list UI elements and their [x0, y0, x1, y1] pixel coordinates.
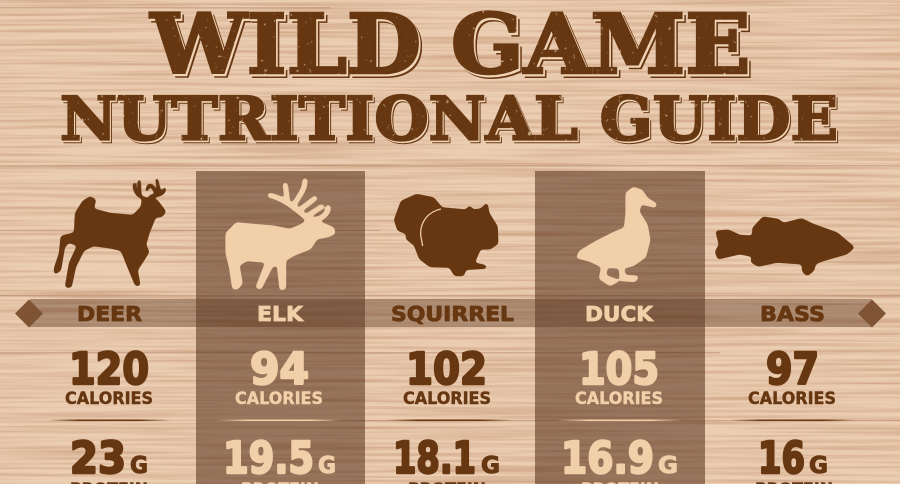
- column: bass: 16: [758, 433, 805, 484]
- icon: squirrel: [395, 195, 497, 275]
- panel: duck column: [535, 171, 705, 484]
- column: squirrel: 18.1: [393, 433, 476, 484]
- column: squirrel: [387, 302, 514, 484]
- column: bass: BASS: [760, 302, 825, 326]
- column: bass: G: [809, 453, 828, 479]
- column: elk: 94: [250, 344, 309, 395]
- column: bass: [730, 302, 855, 484]
- title: nutritional guide: NUTRITIONAL GUIDE: [61, 86, 839, 156]
- column: deer: CALORIES: [65, 389, 153, 408]
- column: bass: 97: [766, 344, 819, 395]
- panel: elk column: [196, 171, 365, 484]
- column: duck: 105: [579, 344, 659, 395]
- title: wild game: WILD GAME: [152, 0, 754, 96]
- icon: squirrel tail outline: [421, 209, 441, 246]
- column: deer: G: [130, 453, 148, 479]
- column: squirrel: 102: [406, 344, 487, 395]
- icon: deer: [55, 179, 165, 287]
- title: wild game: WILD GAME: [151, 0, 752, 95]
- column: duck: CALORIES: [575, 389, 663, 408]
- name ribbon: [15, 299, 886, 328]
- column: duck: [557, 302, 682, 484]
- column: elk: ELK: [257, 302, 304, 326]
- column: deer: 120: [69, 344, 149, 395]
- column: squirrel: G: [481, 453, 500, 479]
- column: deer: [47, 302, 171, 484]
- column: deer: DEER: [77, 302, 142, 326]
- icon: duck: [577, 188, 656, 285]
- column: bass: CALORIES: [748, 389, 836, 408]
- column: squirrel: SQUIRREL: [391, 302, 514, 326]
- title: nutritional guide: NUTRITIONAL GUIDE: [60, 84, 838, 154]
- column: duck: DUCK: [585, 302, 654, 326]
- column: squirrel: CALORIES: [403, 389, 491, 408]
- icon: bass: [716, 218, 853, 275]
- column: elk: CALORIES: [235, 389, 323, 408]
- column: elk: [217, 302, 342, 484]
- column: duck: 16.9: [561, 433, 654, 484]
- column: elk: G: [318, 453, 336, 479]
- column: duck: G: [658, 453, 678, 479]
- column: deer: 23: [70, 433, 126, 484]
- column: elk: 19.5: [223, 433, 314, 484]
- title: nutritional guide: NUTRITIONAL GUIDE: [62, 87, 840, 157]
- icon: elk: [227, 181, 334, 289]
